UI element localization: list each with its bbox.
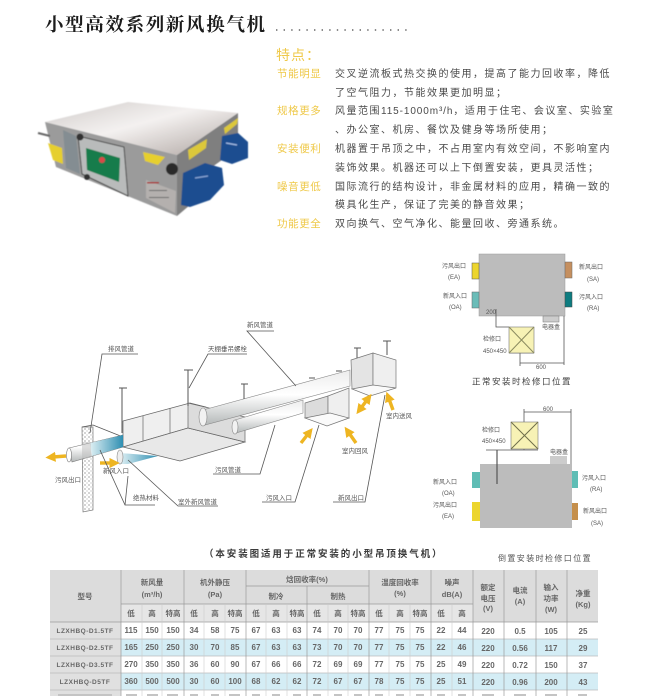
normal installation diagram: 600 — [536, 365, 547, 371]
row LZXHBQ-D3.5TF: 270 — [124, 660, 138, 669]
header labels: 机外静压 — [200, 577, 230, 587]
duct labels and leader lines: 天棚垂吊螺栓 — [208, 344, 248, 353]
row LZXHBQ-D2.5TF — [56, 643, 588, 653]
feature: lower noise: 国际流行的结构设计，非金属材料的应用，精确一致的 — [335, 180, 611, 193]
header labels: 特高 — [166, 608, 181, 618]
row LZXHBQ-D3.5TF: 69 — [354, 660, 363, 669]
row LZXHBQ-D1.5TF — [56, 626, 588, 636]
header labels: 高 — [396, 608, 404, 618]
row LZXHBQ-D3.5TF: 77 — [375, 660, 384, 669]
features text block — [276, 47, 614, 230]
row LZXHBQ-D5TF: 500 — [145, 677, 159, 686]
access hatch inverted — [511, 422, 538, 449]
row LZXHBQ-D2.5TF: 22 — [437, 643, 446, 652]
row LZXHBQ-D5TF: 62 — [272, 677, 281, 686]
normal installation diagram — [442, 254, 603, 386]
row LZXHBQ-D3.5TF: LZXHBQ-D3.5TF — [56, 662, 114, 669]
row LZXHBQ-D1.5TF: 67 — [252, 626, 261, 635]
row LZXHBQ-D5TF: 43 — [579, 678, 588, 687]
normal installation diagram: (RA) — [587, 306, 599, 312]
header labels: (A) — [515, 597, 526, 606]
hangers — [119, 341, 391, 433]
row LZXHBQ-D2.5TF: 70 — [334, 643, 343, 652]
row LZXHBQ-D3.5TF: 49 — [458, 660, 467, 669]
header labels: 特高 — [350, 608, 366, 618]
header labels: 低 — [437, 608, 445, 618]
row LZXHBQ-D3.5TF: 350 — [145, 660, 159, 669]
header labels: 电压 — [480, 593, 496, 603]
row LZXHBQ-D1.5TF: 74 — [313, 626, 322, 635]
header labels: 高 — [272, 608, 280, 618]
header labels: (%) — [394, 589, 406, 598]
yellow airflow arrows — [53, 399, 393, 463]
row LZXHBQ-D3.5TF: 60 — [211, 660, 220, 669]
installation diagram: ducts — [53, 320, 412, 512]
header labels: (V) — [483, 604, 494, 613]
feature: easy installation — [277, 142, 611, 174]
inverted installation diagram: 电器盒 — [550, 448, 568, 456]
header labels: dB(A) — [442, 590, 463, 599]
row LZXHBQ-D5TF: 72 — [313, 677, 322, 686]
inverted installation diagram: 新风入口 — [433, 478, 457, 486]
feature: easy installation: 安装便利 — [277, 142, 321, 155]
row LZXHBQ-D2.5TF: 67 — [252, 643, 261, 652]
inverted installation diagram: (OA) — [442, 491, 455, 497]
normal installation diagram: 正常安装时检修口位置 — [472, 376, 572, 386]
product photo: ventilator unit — [38, 102, 248, 216]
feature: energy saving: 节能明显 — [277, 67, 321, 80]
header labels: 低 — [375, 608, 383, 618]
normal installation diagram: 电器盒 — [542, 323, 560, 331]
row LZXHBQ-D1.5TF: 0.5 — [514, 627, 526, 636]
row LZXHBQ-D2.5TF: 117 — [545, 644, 558, 653]
header labels — [78, 574, 591, 618]
row LZXHBQ-D3.5TF: 67 — [252, 660, 261, 669]
header labels: (m³/h) — [142, 590, 163, 599]
row LZXHBQ-D1.5TF: 150 — [166, 626, 180, 635]
row LZXHBQ-D5TF: 0.96 — [512, 678, 528, 687]
inverted installation diagram — [433, 407, 607, 528]
row LZXHBQ-D1.5TF: 34 — [190, 626, 199, 635]
row LZXHBQ-D3.5TF — [56, 660, 588, 670]
row LZXHBQ-D1.5TF: 77 — [375, 626, 384, 635]
row LZXHBQ-D5TF: 67 — [334, 677, 343, 686]
row LZXHBQ-D5TF — [60, 677, 588, 687]
row LZXHBQ-D5TF: 62 — [293, 677, 302, 686]
header labels: (Kg) — [576, 600, 591, 609]
row LZXHBQ-D5TF: 67 — [354, 677, 363, 686]
row LZXHBQ-D1.5TF: 58 — [211, 626, 220, 635]
header labels: 制热 — [330, 591, 346, 601]
row LZXHBQ-D5TF: 200 — [544, 678, 558, 687]
header labels: 低 — [190, 608, 198, 618]
inverted installation diagram: 600 — [543, 407, 554, 413]
feature: more specifications: 规格更多 — [277, 104, 321, 117]
row LZXHBQ-D3.5TF: 25 — [437, 660, 446, 669]
table caption: （本安装图适用于正常安装的小型吊顶换气机） — [204, 548, 443, 560]
row LZXHBQ-D5TF: 75 — [396, 677, 405, 686]
upper supply-air box — [351, 353, 396, 396]
feature: more specifications: 风量范围115-1000m³/h，适用于住宅、会议室、实验室 — [335, 104, 614, 117]
header labels: 输入 — [544, 582, 559, 592]
normal installation diagram: (SA) — [587, 277, 599, 283]
inverted installation diagram: 检修口 — [482, 426, 500, 434]
header labels: 电流 — [512, 585, 528, 595]
row LZXHBQ-D2.5TF: 75 — [396, 643, 405, 652]
row LZXHBQ-D5TF: 25 — [437, 677, 446, 686]
duct labels and leader lines: 新风出口 — [338, 493, 364, 502]
row LZXHBQ-D2.5TF: 75 — [416, 643, 425, 652]
exhaust and fresh air stubs — [66, 435, 158, 464]
duct labels and leader lines: 新风管道 — [247, 320, 274, 329]
table header background — [50, 570, 598, 622]
duct labels and leader lines — [55, 320, 412, 506]
duct labels and leader lines: 室内送风 — [386, 411, 412, 420]
row LZXHBQ-D1.5TF: 63 — [272, 626, 281, 635]
row LZXHBQ-D2.5TF: 165 — [124, 643, 138, 652]
row LZXHBQ-D3.5TF: 69 — [334, 660, 343, 669]
row LZXHBQ-D3.5TF: 0.72 — [512, 661, 528, 670]
cropped final row: only the tops of illegible values are visible — [58, 694, 587, 696]
row LZXHBQ-D5TF: 51 — [458, 677, 467, 686]
row LZXHBQ-D2.5TF: 250 — [166, 643, 180, 652]
row LZXHBQ-D3.5TF: 220 — [481, 661, 495, 670]
header labels: 低 — [313, 608, 321, 618]
header labels: 噪声 — [444, 577, 460, 587]
inverted installation diagram: 新风出口 — [583, 507, 607, 515]
inverted installation diagram: 450×450 — [482, 439, 506, 445]
row LZXHBQ-D3.5TF: 36 — [190, 660, 199, 669]
feature: complete functions — [277, 217, 565, 230]
row LZXHBQ-D2.5TF: 70 — [211, 643, 220, 652]
row LZXHBQ-D2.5TF: 63 — [293, 643, 302, 652]
inverted installation diagram: 污风出口 — [433, 501, 457, 509]
normal installation diagram: 新风入口 — [443, 292, 467, 300]
feature: complete functions: 双向换气、空气净化、能量回收、旁通系统。 — [335, 217, 565, 230]
feature: complete functions: 功能更全 — [277, 217, 321, 230]
row LZXHBQ-D5TF: LZXHBQ-D5TF — [60, 679, 110, 686]
lower return-air box — [305, 388, 349, 426]
header labels: 新风量 — [141, 577, 164, 587]
inverted installation diagram: (RA) — [590, 487, 602, 493]
row LZXHBQ-D1.5TF: 25 — [579, 627, 588, 636]
header labels: 功率 — [544, 593, 559, 603]
row LZXHBQ-D3.5TF: 66 — [293, 660, 302, 669]
row LZXHBQ-D5TF: 220 — [481, 678, 495, 687]
inverted diagram caption: 倒置安装时检修口位置 — [498, 553, 592, 563]
duct labels and leader lines: 绝热材料 — [133, 493, 160, 502]
normal installation diagram: 污风入口 — [579, 293, 603, 301]
row LZXHBQ-D5TF: 68 — [252, 677, 261, 686]
header labels: 低 — [252, 608, 260, 618]
header labels: 特高 — [290, 608, 305, 618]
specification table — [50, 570, 598, 696]
duct labels and leader lines: 污风入口 — [266, 494, 292, 502]
normal installation diagram: 污风出口 — [442, 262, 466, 270]
row LZXHBQ-D1.5TF: 220 — [481, 627, 495, 636]
wall — [82, 425, 123, 512]
row LZXHBQ-D2.5TF: 46 — [458, 643, 467, 652]
row LZXHBQ-D3.5TF: 75 — [396, 660, 405, 669]
normal installation diagram: (EA) — [448, 275, 460, 281]
header labels: 高 — [458, 608, 466, 618]
row LZXHBQ-D1.5TF: 63 — [293, 626, 302, 635]
row LZXHBQ-D2.5TF: 30 — [190, 643, 199, 652]
row LZXHBQ-D5TF: 500 — [166, 677, 180, 686]
duct labels and leader lines: 室内回风 — [342, 446, 368, 455]
row LZXHBQ-D2.5TF: 0.56 — [512, 644, 528, 653]
title: 小型高效系列新风换气机 — [45, 14, 267, 36]
feature: easy installation: 装饰效果。机器还可以上下倒置安装，更具灵活性； — [335, 161, 600, 174]
fresh air pipes — [199, 370, 350, 434]
feature: more specifications — [277, 104, 614, 136]
row LZXHBQ-D2.5TF: 63 — [272, 643, 281, 652]
row LZXHBQ-D1.5TF: 70 — [354, 626, 363, 635]
table row backgrounds — [50, 622, 598, 696]
header labels: 焓回收率(%) — [286, 574, 328, 584]
duct labels and leader lines: 污风管道 — [215, 465, 242, 474]
row LZXHBQ-D3.5TF: 72 — [313, 660, 322, 669]
row LZXHBQ-D2.5TF: LZXHBQ-D2.5TF — [56, 645, 114, 652]
header labels: 特高 — [228, 608, 243, 618]
row LZXHBQ-D2.5TF: 77 — [375, 643, 384, 652]
header labels: 高 — [211, 608, 219, 618]
row LZXHBQ-D1.5TF: 70 — [334, 626, 343, 635]
row LZXHBQ-D3.5TF: 37 — [579, 661, 588, 670]
inverted installation diagram: 污风入口 — [582, 474, 606, 482]
header labels: (W) — [545, 605, 558, 614]
feature: energy saving: 交叉逆流板式热交换的使用，提高了能力回收率，降低 — [335, 67, 611, 80]
row LZXHBQ-D1.5TF: 150 — [145, 626, 159, 635]
header labels: 制冷 — [268, 591, 284, 601]
header labels: 特高 — [412, 608, 428, 618]
feature: easy installation: 机器置于吊顶之中，不占用室内有效空间，不影响室内 — [335, 142, 611, 155]
feature: energy saving: 了空气阻力，节能效果更加明显； — [335, 86, 508, 99]
row LZXHBQ-D1.5TF: 75 — [231, 626, 240, 635]
row LZXHBQ-D3.5TF: 90 — [231, 660, 240, 669]
header labels: (Pa) — [208, 590, 223, 599]
feature: lower noise: 噪音更低 — [277, 180, 321, 193]
feature: lower noise: 模具化生产，保证了完美的静音效果； — [335, 198, 530, 211]
row LZXHBQ-D3.5TF: 66 — [272, 660, 281, 669]
header labels: 型号 — [78, 591, 93, 601]
normal installation diagram: 检修口 — [483, 335, 501, 343]
row LZXHBQ-D5TF: 60 — [211, 677, 220, 686]
access hatch — [509, 327, 534, 353]
row LZXHBQ-D2.5TF: 220 — [481, 644, 495, 653]
normal installation diagram: 200 — [486, 310, 497, 316]
feature: energy saving — [277, 67, 611, 99]
row LZXHBQ-D3.5TF: 150 — [544, 661, 558, 670]
row LZXHBQ-D2.5TF: 85 — [231, 643, 240, 652]
header labels: 低 — [127, 608, 135, 618]
normal installation diagram: 450×450 — [483, 349, 507, 355]
header labels: 高 — [334, 608, 342, 618]
row LZXHBQ-D5TF: 360 — [124, 677, 138, 686]
row LZXHBQ-D1.5TF: 44 — [458, 626, 467, 635]
header labels: 温度回收率 — [381, 577, 419, 587]
inverted installation diagram: (SA) — [591, 521, 603, 527]
feature: more specifications: 、办公室、机房、餐饮及健身等场所使用； — [335, 123, 554, 136]
row LZXHBQ-D2.5TF: 70 — [354, 643, 363, 652]
normal installation diagram: 新风出口 — [579, 263, 603, 271]
row LZXHBQ-D2.5TF: 73 — [313, 643, 322, 652]
row LZXHBQ-D5TF: 100 — [228, 677, 242, 686]
central unit box — [123, 403, 245, 461]
row LZXHBQ-D1.5TF: 22 — [437, 626, 446, 635]
normal installation diagram: (OA) — [449, 305, 462, 311]
row LZXHBQ-D3.5TF: 350 — [166, 660, 180, 669]
row LZXHBQ-D1.5TF: 75 — [416, 626, 425, 635]
duct labels and leader lines: 污风出口 — [55, 475, 81, 484]
duct labels and leader lines: 排风管道 — [108, 344, 134, 353]
row LZXHBQ-D2.5TF: 29 — [579, 644, 588, 653]
header labels: 高 — [148, 608, 156, 618]
row LZXHBQ-D5TF: 30 — [190, 677, 199, 686]
feature: lower noise — [277, 180, 611, 211]
row LZXHBQ-D1.5TF: LZXHBQ-D1.5TF — [56, 628, 114, 635]
row LZXHBQ-D2.5TF: 250 — [145, 643, 159, 652]
header labels: 额定 — [480, 582, 496, 592]
inverted installation diagram: (EA) — [442, 514, 454, 520]
row LZXHBQ-D1.5TF: 75 — [396, 626, 405, 635]
row LZXHBQ-D1.5TF: 115 — [125, 626, 138, 635]
row LZXHBQ-D3.5TF: 75 — [416, 660, 425, 669]
row LZXHBQ-D5TF: 75 — [416, 677, 425, 686]
duct labels and leader lines: 新风入口 — [103, 466, 129, 475]
row LZXHBQ-D1.5TF: 105 — [544, 627, 558, 636]
features heading: 特点： — [276, 47, 321, 63]
duct labels and leader lines: 室外新风管道 — [178, 497, 218, 506]
header labels: 净重 — [576, 588, 591, 598]
row LZXHBQ-D5TF: 78 — [375, 677, 384, 686]
